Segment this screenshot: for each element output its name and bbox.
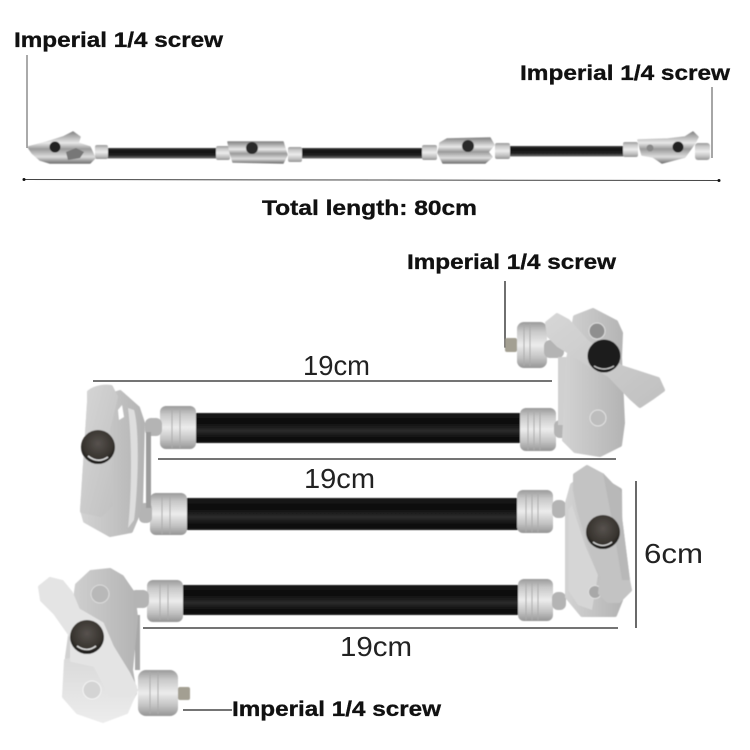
dimension: 6cm height: 6cm	[644, 538, 703, 569]
dimension: lower tube: 19cm	[340, 631, 412, 662]
product photo: folded arm	[40, 310, 663, 722]
screws	[178, 338, 517, 700]
dimension: middle tube: 19cm	[304, 463, 375, 494]
leader line: top left screw	[26, 55, 28, 148]
leader line: top right screw	[711, 87, 713, 158]
label: top left screw: Imperial 1/4 screw	[14, 28, 223, 52]
necks	[130, 340, 568, 610]
collars	[138, 322, 556, 716]
leader line: bottom screw	[183, 709, 232, 711]
dimension: upper tube: 19cm	[303, 350, 370, 381]
clamp: top left	[82, 387, 151, 535]
tubes	[180, 413, 522, 615]
clamp: middle right	[567, 467, 630, 615]
knob: bottom left	[70, 620, 104, 654]
label: total length: Total length: 80cm	[262, 196, 477, 220]
label: top right screw: Imperial 1/4 screw	[520, 61, 730, 85]
label: folded right screw: Imperial 1/4 screw	[407, 250, 616, 274]
product photo: fully extended arm	[28, 132, 710, 163]
arrow: total length	[22, 178, 720, 182]
clamp: bottom left	[40, 570, 140, 722]
knob: middle right	[586, 515, 620, 549]
knob: top left	[81, 430, 115, 464]
label: bottom screw: Imperial 1/4 screw	[232, 697, 441, 721]
leader line: folded right screw	[505, 281, 509, 347]
clamp: top right	[547, 310, 663, 455]
knob: top right	[588, 340, 620, 372]
